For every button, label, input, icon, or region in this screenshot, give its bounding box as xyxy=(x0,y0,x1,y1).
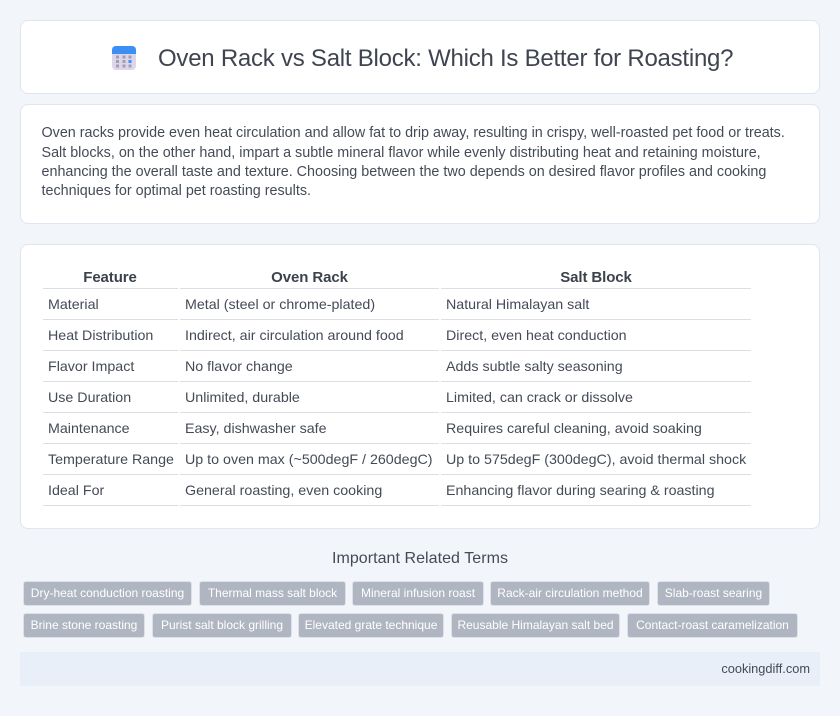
table header: Oven Rack xyxy=(271,269,348,286)
row: material: Metal (steel or chrome-plated) xyxy=(185,297,375,313)
related term tags: Slab-roast searing xyxy=(665,586,762,600)
row: temperature range: Temperature Range xyxy=(48,452,174,468)
row: heat distribution: Indirect, air circulation around food xyxy=(185,328,404,344)
icon: calendar xyxy=(112,46,136,70)
row: maintenance: Requires careful cleaning, avoid soaking xyxy=(446,421,702,437)
title card xyxy=(20,20,820,94)
row: temperature range: Up to oven max (~500degF / 260degC) xyxy=(185,452,433,468)
row: use duration: Use Duration xyxy=(48,390,131,406)
row: flavor impact xyxy=(48,359,623,375)
row: ideal for: Enhancing flavor during searing & roasting xyxy=(446,483,715,499)
row: use duration: Unlimited, durable xyxy=(185,390,300,406)
related term tags: Brine stone roasting xyxy=(31,618,137,632)
related term tags xyxy=(23,581,798,638)
intro paragraph: techniques for optimal pet roasting results. xyxy=(42,183,311,199)
row: material xyxy=(48,297,590,313)
row: flavor impact: Flavor Impact xyxy=(48,359,134,375)
related term tags: Mineral infusion roast xyxy=(361,586,475,600)
row: heat distribution: Heat Distribution xyxy=(48,328,153,344)
row: use duration: Limited, can crack or dissolve xyxy=(446,390,633,406)
related term tags: Rack-air circulation method xyxy=(497,586,643,600)
row: maintenance: Easy, dishwasher safe xyxy=(185,421,327,437)
table header xyxy=(83,269,632,286)
related term tags: Dry-heat conduction roasting xyxy=(31,586,184,600)
row: temperature range xyxy=(48,452,746,468)
row: temperature range: Up to 575degF (300degC), avoid thermal shock xyxy=(446,452,746,468)
row: maintenance xyxy=(48,421,702,437)
row: flavor impact: Adds subtle salty seasoning xyxy=(446,359,623,375)
related term tags: Thermal mass salt block xyxy=(208,586,337,600)
related term tags: Contact-roast caramelization xyxy=(636,618,789,632)
row: ideal for: General roasting, even cooking xyxy=(185,483,382,499)
intro paragraph: enhancing the overall taste and texture. Choosing between the two depends on desired flavor profiles and cooking xyxy=(42,164,766,180)
row: heat distribution xyxy=(48,328,627,344)
comparison table panel xyxy=(20,244,820,529)
row: material: Material xyxy=(48,297,99,313)
related term tags: Purist salt block grilling xyxy=(161,618,283,632)
intro paragraph: Salt blocks, on the other hand, impart a subtle mineral flavor while evenly distributing heat and retaining moisture, xyxy=(42,145,761,161)
footer bar xyxy=(20,652,820,686)
title: Oven Rack vs Salt Block: Which Is Better for Roasting? xyxy=(158,45,733,72)
row: use duration xyxy=(48,390,633,406)
intro paragraph xyxy=(42,125,785,199)
row: material: Natural Himalayan salt xyxy=(446,297,589,313)
row: ideal for: Ideal For xyxy=(48,483,104,499)
table header: Feature xyxy=(83,269,137,286)
row: flavor impact: No flavor change xyxy=(185,359,293,375)
footer domain: cookingdiff.com xyxy=(721,661,810,676)
related term tags: Elevated grate technique xyxy=(305,618,437,632)
related term tags: Reusable Himalayan salt bed xyxy=(457,618,614,632)
row: maintenance: Maintenance xyxy=(48,421,130,437)
intro paragraph: Oven racks provide even heat circulation and allow fat to drip away, resulting in crispy, well-roasted pet food or treats. xyxy=(42,125,785,141)
row: ideal for xyxy=(48,483,715,499)
related terms heading: Important Related Terms xyxy=(332,550,508,567)
table header: Salt Block xyxy=(560,269,632,286)
intro text panel xyxy=(20,104,820,224)
row: heat distribution: Direct, even heat conduction xyxy=(446,328,627,344)
